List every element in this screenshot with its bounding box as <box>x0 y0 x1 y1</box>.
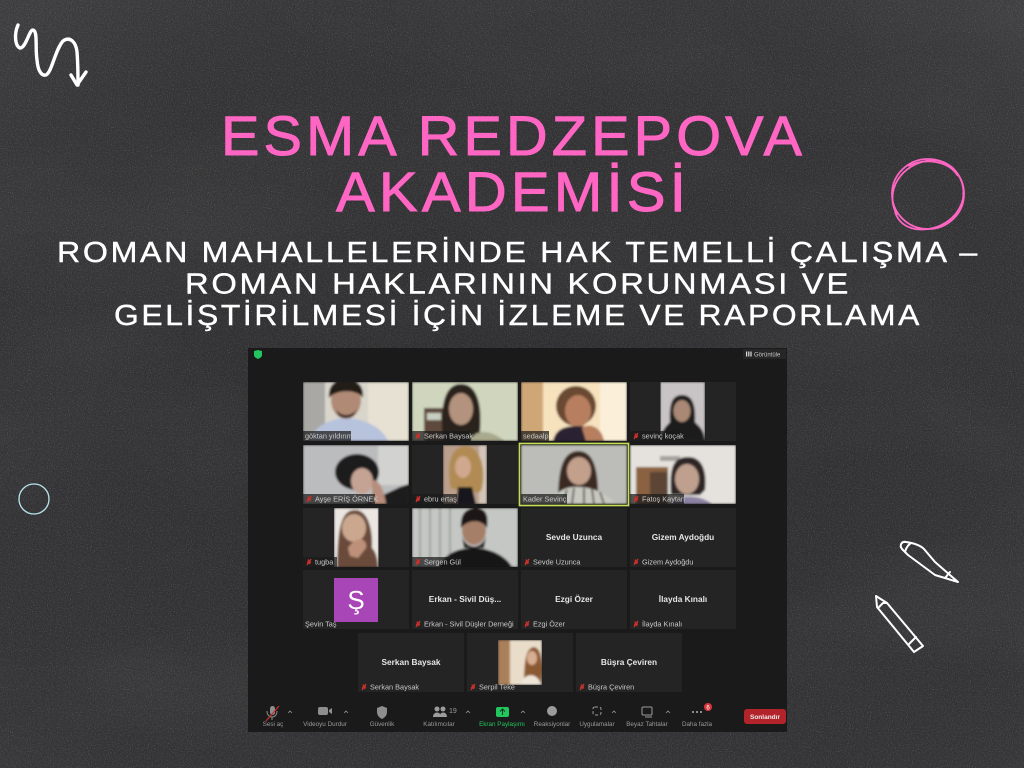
participant: Büşra Çeviren: Büşra Çeviren <box>588 682 634 692</box>
view button <box>743 349 786 359</box>
participant: sedaalp: sedaalp <box>523 432 549 440</box>
toolbar: whiteboards: Beyaz Tahtalar <box>626 721 668 728</box>
toolbar: apps <box>579 707 615 728</box>
toolbar: apps: Uygulamalar <box>579 721 615 728</box>
participant: Serkan Baysak: Serkan Baysak <box>424 432 473 440</box>
title <box>221 104 806 223</box>
icon: pen <box>901 542 958 582</box>
toolbar: more: 6 <box>706 705 710 711</box>
participant: ebru ertaş <box>412 445 518 504</box>
participant: Erkan - Sivil Düşler Derneği <box>412 570 518 629</box>
participant: Fatoş Kaytan: Fatoş Kaytan <box>642 494 685 504</box>
toolbar: more <box>682 703 713 728</box>
participant: Sevde Uzunca <box>521 508 627 567</box>
participant: Sergen Gül <box>412 508 518 567</box>
participant: Sevde Uzunca: Sevde Uzunca <box>533 558 581 566</box>
toolbar: end button <box>744 709 786 724</box>
participant: Gizem Aydoğdu: Gizem Aydoğdu <box>652 532 714 542</box>
participant: Kader Sevinç (active speaker): Kader Sevinç <box>523 494 567 504</box>
participant: ebru ertaş: ebru ertaş <box>424 494 457 504</box>
toolbar: end button: Sonlandır <box>750 714 780 721</box>
video call screenshot <box>248 348 787 732</box>
participant: Serkan Baysak (name only): Serkan Baysak <box>370 682 419 692</box>
toolbar: participants: 19 <box>449 708 457 715</box>
participant: Şevin Taş <box>303 570 409 629</box>
participant: Erkan - Sivil Düşler Derneği: Erkan - Sivil Düşler Derneği <box>424 620 514 628</box>
title: ESMA REDZEPOVA <box>221 104 806 167</box>
participant: göktan yıldırım <box>303 380 409 441</box>
toolbar <box>263 703 786 728</box>
participant: Serkan Baysak (name only) <box>358 633 464 692</box>
title: AKADEMİSİ <box>336 160 690 223</box>
participant: Gizem Aydoğdu <box>630 508 736 567</box>
participant: Şevin Taş: Ş <box>347 585 365 615</box>
toolbar: reactions: Reaksiyonlar <box>534 721 570 728</box>
subtitle: GELİŞTİRİLMESİ İÇİN İZLEME VE RAPORLAMA <box>114 299 922 332</box>
toolbar: security <box>370 706 395 728</box>
toolbar: security: Güvenlik <box>370 721 395 728</box>
participant: sedaalp <box>521 382 627 441</box>
toolbar: reactions <box>534 706 570 728</box>
participant: Kader Sevinç (active speaker) <box>520 444 628 506</box>
participant: Sevde Uzunca: Sevde Uzunca <box>546 532 603 542</box>
participant: tugba <box>303 508 409 567</box>
toolbar: mute <box>263 706 283 728</box>
participant: Serpil Teke: Serpil Teke <box>479 682 515 692</box>
participant: İlayda Kınalı: İlayda Kınalı <box>659 594 707 604</box>
icon: blue circle <box>19 484 49 514</box>
participant: Sergen Gül: Sergen Gül <box>424 558 461 566</box>
toolbar: carets <box>288 711 670 713</box>
subtitle: ROMAN MAHALLELERİNDE HAK TEMELLİ ÇALIŞMA – <box>57 236 980 269</box>
toolbar: mute: Sesi aç <box>263 721 283 728</box>
participant: İlayda Kınalı <box>630 570 736 629</box>
participant: Fatoş Kaytan <box>630 445 736 504</box>
toolbar: whiteboards <box>626 707 668 728</box>
participant: Ayşe ERİŞ ÖRNEK: Ayşe ERİŞ ÖRNEK <box>315 494 378 504</box>
participant: Gizem Aydoğdu: Gizem Aydoğdu <box>642 558 693 566</box>
participant: Serkan Baysak <box>412 382 518 441</box>
participant: Serkan Baysak (name only): Serkan Baysak <box>381 657 441 667</box>
participant: sevinç koçak <box>630 382 736 441</box>
participant: göktan yıldırım: göktan yıldırım <box>305 432 353 440</box>
participant: Ayşe ERİŞ ÖRNEK <box>303 445 409 504</box>
participant: Serpil Teke <box>467 633 573 692</box>
participant: Büşra Çeviren: Büşra Çeviren <box>601 657 657 667</box>
icon: pencil <box>876 596 923 652</box>
participant: Ezgi Özer <box>521 570 627 629</box>
view button: Görüntüle <box>754 352 781 358</box>
subtitle: ROMAN HAKLARININ KORUNMASI VE <box>185 268 851 300</box>
participant: Şevin Taş: Şevin Taş <box>305 620 337 628</box>
subtitle <box>57 236 980 332</box>
icon: squiggle arrow <box>16 25 86 85</box>
toolbar: participants <box>423 706 457 728</box>
participant: Büşra Çeviren <box>576 633 682 692</box>
toolbar: video: Videoyu Durdur <box>303 721 347 728</box>
participant: tugba: tugba <box>315 558 334 566</box>
toolbar: more: Daha fazla <box>682 721 713 728</box>
participant: İlayda Kınalı: İlayda Kınalı <box>642 620 682 628</box>
toolbar: video <box>303 707 347 728</box>
participant: sevinç koçak: sevinç koçak <box>642 432 684 440</box>
participant: Ezgi Özer: Ezgi Özer <box>533 620 566 628</box>
toolbar: participants: Katılımcılar <box>423 721 455 728</box>
toolbar: share screen <box>479 707 525 728</box>
icon: security shield <box>254 350 262 359</box>
participant: Ezgi Özer: Ezgi Özer <box>555 594 594 604</box>
toolbar: share screen: Ekran Paylaşımı <box>479 721 525 728</box>
participant: Erkan - Sivil Düşler Derneği: Erkan - Sivil Düş... <box>429 594 501 604</box>
icon: pink scribble circle <box>892 159 964 229</box>
